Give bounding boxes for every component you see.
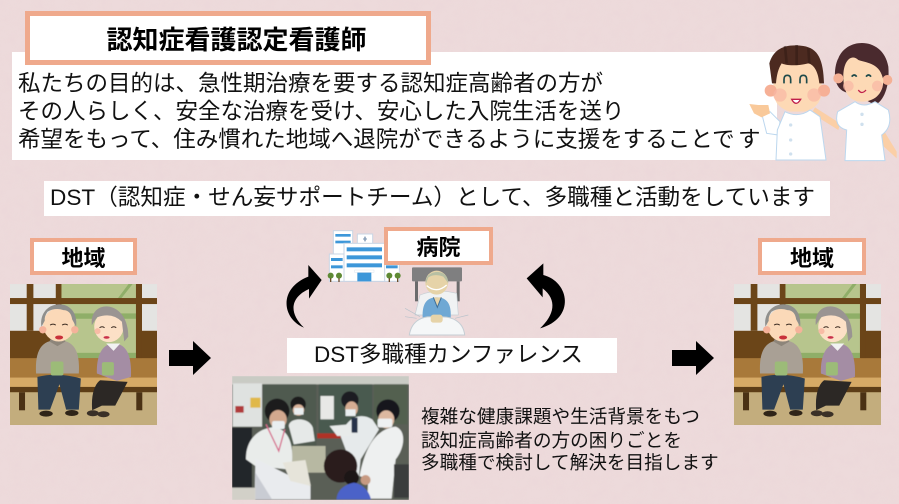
photo: conference team xyxy=(232,376,409,500)
panel: mission statement xyxy=(12,52,777,160)
purpose line 1: 複雑な健康課題や生活背景をもつ xyxy=(421,406,700,427)
label: community right: 地域 xyxy=(790,246,834,270)
text block: conference purpose xyxy=(421,406,719,473)
title xyxy=(25,11,431,65)
text in front of the nurses: す xyxy=(738,127,761,152)
mission text line 3: 希望をもって、住み慣れた地域へ退院ができるように支援をすることで xyxy=(18,127,735,152)
panel: DST banner xyxy=(44,181,830,216)
arrow: curved right xyxy=(526,264,565,328)
arrow: to hospital xyxy=(169,341,211,375)
panel: DST conference xyxy=(287,338,617,373)
label: hospital: 病院 xyxy=(416,235,460,260)
DST description: DST（認知症・せん妄サポートチーム）として、多職種と活動をしています xyxy=(50,185,815,210)
arrow: to community xyxy=(672,341,714,375)
icon: nurses xyxy=(749,43,897,162)
mission text line 1: 私たちの目的は、急性期治療を要する認知症高齢者の方が xyxy=(18,71,603,96)
purpose line 3: 多職種で検討して解決を目指します xyxy=(421,452,719,473)
label: community left xyxy=(30,238,137,275)
purpose line 2: 認知症高齢者の方の困りごとを xyxy=(421,430,682,451)
icon: patient in bed xyxy=(405,267,468,336)
conference heading: DST多職種カンファレンス xyxy=(314,342,583,367)
label: hospital xyxy=(384,227,493,265)
arrow: curved left xyxy=(286,265,322,328)
icon: hospital xyxy=(328,230,401,282)
mission text line 2: その人らしく、安全な治療を受け、安心した入院生活を送り xyxy=(18,99,624,124)
label: community right xyxy=(758,238,866,275)
icon: elderly couple right xyxy=(734,284,881,425)
label: community left: 地域 xyxy=(61,246,106,270)
icon: elderly couple left xyxy=(10,284,157,425)
title: 認知症看護認定看護師 xyxy=(106,24,366,54)
